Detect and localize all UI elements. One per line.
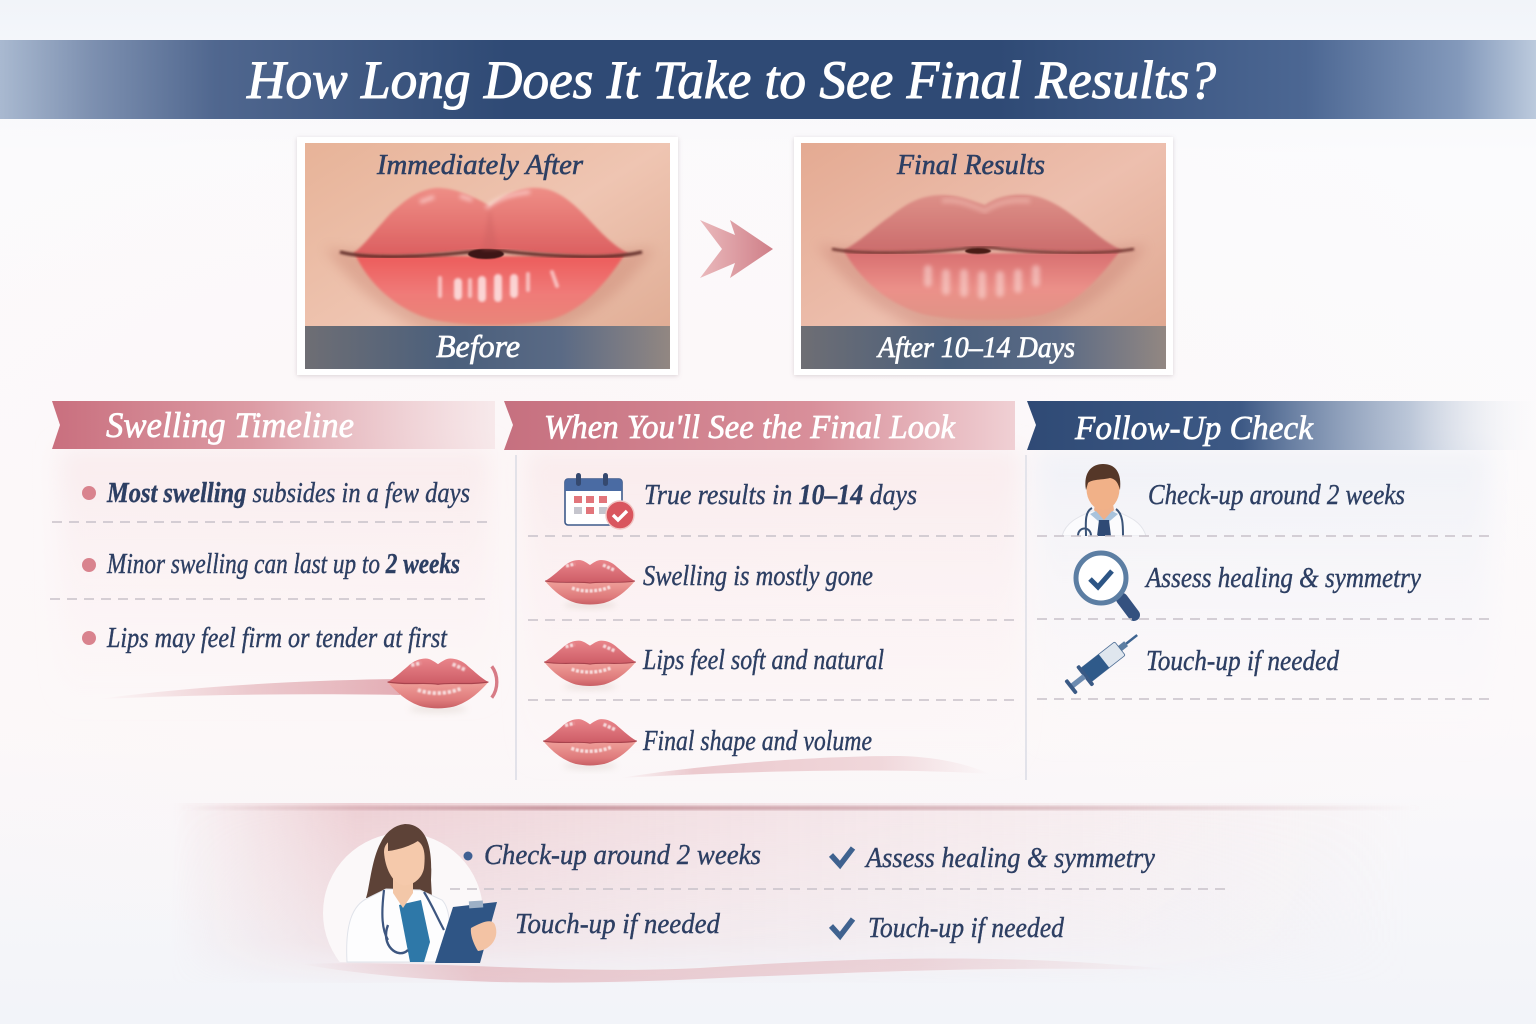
item: most swelling subsides: Most swelling subsides in a few days (106, 478, 470, 509)
caption: after 10-14 days: After 10–14 Days (876, 331, 1075, 364)
heading banner: follow-up check: Follow-Up Check (1074, 410, 1314, 447)
heading banner: follow-up check (1027, 401, 1536, 450)
final photo panel (794, 137, 1173, 375)
icon: lips (545, 560, 635, 608)
photo label: final results: Final Results (896, 150, 1045, 181)
illustration: female doctor with clipboard (323, 824, 497, 963)
item: touch-up: Touch-up if needed (515, 909, 721, 940)
item: touch-up: Touch-up if needed (868, 913, 1065, 944)
item: true results: True results in 10–14 days (644, 480, 917, 511)
panel: bottom summary (192, 803, 1374, 983)
lips: final results (822, 194, 1142, 326)
panel: swelling timeline (50, 401, 497, 713)
decorative swoosh (620, 756, 990, 778)
icon: magnifier (1076, 553, 1134, 615)
item: soft and natural: Lips feel soft and natural (642, 645, 884, 676)
icon: lips (543, 719, 637, 770)
item: minor swelling: Minor swelling can last up to 2 weeks (106, 549, 460, 580)
icon: calendar (565, 473, 634, 529)
heading banner: final look: When You'll See the Final Look (544, 409, 956, 446)
arrow (700, 220, 773, 278)
heading banner: final look (504, 401, 1015, 450)
wave at bottom (300, 958, 1180, 983)
panel: when you'll see the final look (504, 401, 1026, 780)
item: assess healing: Assess healing & symmetry (864, 843, 1156, 874)
photo caption bar (305, 326, 670, 369)
icon: lips (544, 641, 636, 690)
bullet (464, 852, 472, 860)
title: How Long Does It Take to See Final Results? (246, 50, 1216, 110)
item: touch-up: Touch-up if needed (1146, 646, 1340, 677)
photo label: immediately after: Immediately After (376, 150, 583, 181)
heading banner: swelling timeline: Swelling Timeline (106, 405, 354, 445)
lips: immediately after (330, 186, 650, 326)
item: final shape: Final shape and volume (642, 726, 872, 757)
bullet (82, 631, 96, 645)
icon: male doctor (1062, 464, 1146, 536)
item: swelling gone: Swelling is mostly gone (643, 561, 873, 592)
panel: follow-up check (1027, 401, 1500, 700)
before photo panel (297, 137, 678, 375)
item: assess healing: Assess healing & symmetry (1144, 563, 1422, 594)
decorative swoosh (100, 679, 400, 699)
caption: before: Before (436, 328, 520, 364)
title banner (0, 40, 1536, 119)
icon: syringe (1062, 625, 1145, 698)
icon: check (831, 919, 853, 936)
item: firm or tender: Lips may feel firm or tender at first (106, 623, 448, 654)
item: check-up: Check-up around 2 weeks (484, 840, 761, 871)
bullet (82, 558, 96, 572)
icon: check (831, 848, 853, 865)
icon: swollen lips (388, 658, 497, 713)
photo caption bar (801, 326, 1166, 369)
heading banner: swelling timeline (52, 401, 495, 449)
bullet (82, 486, 96, 500)
item: check-up: Check-up around 2 weeks (1148, 480, 1405, 511)
